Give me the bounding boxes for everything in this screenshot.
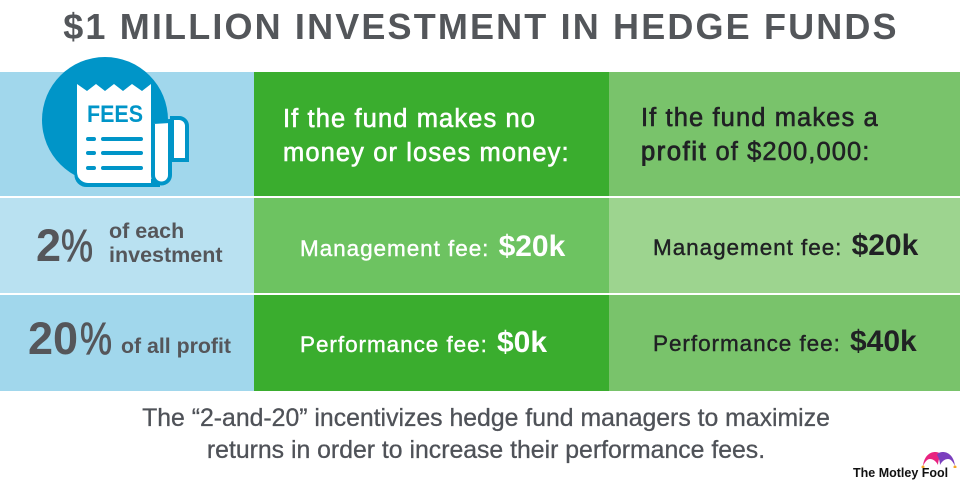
label: of all profit: of all profit [121, 334, 231, 358]
panel: row 2% profit [609, 198, 960, 293]
icon: fees receipt [42, 57, 189, 187]
heading: no profit scenario [283, 105, 570, 167]
caption: returns in order to increase their performance fees. [207, 437, 765, 464]
heading: no profit scenario: If the fund makes no [283, 105, 536, 133]
title: $1 MILLION INVESTMENT IN HEDGE FUNDS [63, 6, 899, 47]
stat: 2% of each investment: 2 [36, 220, 61, 271]
panel: row 20% no profit [254, 295, 609, 391]
stat: 2% of each investment [36, 220, 93, 271]
text: management fee no profit: Management fee: $20k [300, 230, 565, 263]
stat: 20% of all profit [28, 313, 112, 364]
text: performance fee profit: Performance fee: $40k [653, 325, 917, 358]
stat: 2% of each investment: % [61, 220, 93, 271]
label: of each investment: of each [109, 219, 184, 243]
panel: row 2% no profit [254, 198, 609, 293]
panel: header left [0, 72, 254, 196]
label: of each investment: investment [109, 243, 223, 267]
label: of each investment [109, 219, 223, 267]
panel: row 20% profit [609, 295, 960, 391]
panel: header no profit [254, 72, 609, 196]
panel: header profit [609, 72, 960, 196]
logo wordmark: The Motley Fool [853, 466, 948, 480]
caption [142, 405, 830, 464]
caption: The “2-and-20” incentivizes hedge fund managers to maximize [142, 405, 830, 432]
heading: profit scenario: profit of $200,000: [641, 138, 870, 166]
icon: fees receipt: FEES [87, 101, 143, 128]
heading: profit scenario: If the fund makes a [641, 104, 879, 132]
heading: profit scenario [641, 104, 879, 166]
heading: no profit scenario: money or loses money: [283, 139, 570, 167]
logo: The Motley Fool [853, 452, 956, 480]
text: performance fee no profit: Performance fee: $0k [300, 326, 547, 359]
stat: 20% of all profit: 20 [28, 313, 78, 364]
text: management fee profit: Management fee: $20k [653, 229, 918, 262]
stat: 20% of all profit: % [80, 313, 112, 364]
panel: row 2% label [0, 198, 254, 293]
logo icon: jester hat [922, 452, 956, 468]
panel: row 20% label [0, 295, 254, 391]
